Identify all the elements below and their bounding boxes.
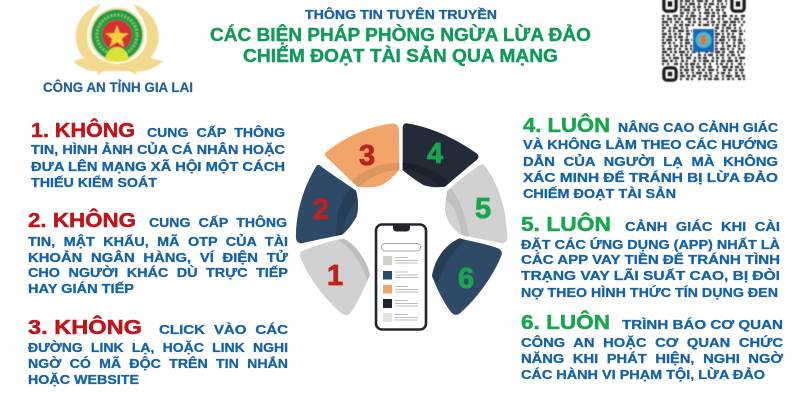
rule 1: TIN, HÌNH ẢNH CỦA CÁ NHÂN HOẶC <box>31 142 286 157</box>
rule 4: CHIẾM ĐOẠT TÀI SẢN <box>523 186 676 201</box>
rule 3: HOẶC WEBSITE <box>28 372 139 387</box>
rule 1 <box>31 118 286 190</box>
title: THÔNG TIN TUYÊN TRUYỀN <box>305 7 497 22</box>
rule 4: XÁC MINH ĐỂ TRÁNH BỊ LỪA ĐẢO <box>523 170 778 185</box>
rule 1: THIẾU KIỂM SOÁT <box>31 175 157 190</box>
rule 3: NGỜ CÓ MÃ ĐỘC TRÊN TIN NHẮN <box>28 356 288 371</box>
title: CÁC BIỆN PHÁP PHÒNG NGỪA LỪA ĐẢO <box>210 24 591 45</box>
rule 4: DẪN CỦA NGƯỜI LẠ MÀ KHÔNG <box>523 154 778 169</box>
rule 2: 2. KHÔNG <box>28 208 136 232</box>
QR code <box>662 0 745 80</box>
segment 2 <box>296 165 358 243</box>
rule 3: ĐƯỜNG LINK LẠ, HOẶC LINK NGHI <box>28 340 288 355</box>
rule 4: NÂNG CAO CẢNH GIÁC <box>618 120 779 135</box>
segment 3 <box>325 123 399 187</box>
logo: police emblem <box>73 4 163 75</box>
segment 1 <box>300 239 370 315</box>
rule 2: TIN, MẬT KHẨU, MÃ OTP CỦA TÀI <box>28 234 288 249</box>
rule 5: CẢNH GIÁC KHI CÀI <box>625 219 780 234</box>
rule 2: HAY GIÁN TIẾP <box>28 281 134 296</box>
phone illustration <box>376 224 426 330</box>
rule 2: CUNG CẤP THÔNG <box>149 215 287 230</box>
ring of numbered segments <box>296 123 507 315</box>
segment 2: 2 <box>313 194 329 226</box>
segment 1: 1 <box>327 260 343 292</box>
rule 1: 1. KHÔNG <box>31 118 135 142</box>
title: CHIẾM ĐOẠT TÀI SẢN QUA MẠNG <box>243 45 558 66</box>
rule 3: 3. KHÔNG <box>28 315 142 339</box>
segment 4 <box>403 123 478 187</box>
segment 6 <box>432 238 502 315</box>
rule 5: ĐẶT CÁC ỨNG DỤNG (APP) NHẤT LÀ <box>521 237 781 252</box>
rule 6: CÁC HÀNH VI PHẠM TỘI, LỪA ĐẢO <box>521 367 765 382</box>
rule 5: CÁC APP VAY TIỀN ĐỂ TRÁNH TÌNH <box>521 252 780 267</box>
rule 1: CUNG CẤP THÔNG <box>147 125 285 140</box>
rule 5: TRẠNG VAY LÃI SUẤT CAO, BỊ ĐÒI <box>521 268 780 283</box>
rule 2: CHO NGƯỜI KHÁC DÙ TRỰC TIẾP <box>28 265 288 280</box>
rule 4: 4. LUÔN <box>523 113 610 137</box>
rule 5: 5. LUÔN <box>521 212 611 236</box>
rule 2 <box>28 208 288 296</box>
rule 6: NĂNG KHI PHÁT HIỆN, NGHI NGỜ <box>521 351 784 366</box>
rule 4: VÀ KHÔNG LÀM THEO CÁC HƯỚNG <box>523 137 778 152</box>
segment 4: 4 <box>427 138 443 170</box>
title <box>210 7 591 66</box>
rule 5 <box>521 212 781 300</box>
logo caption: CÔNG AN TỈNH GIA LAI <box>43 80 193 95</box>
rule 6: CÔNG AN HOẶC CƠ QUAN CHỨC <box>521 335 784 350</box>
segment 5: 5 <box>475 193 491 225</box>
segment 5 <box>445 164 507 243</box>
rule 5: NỢ THEO HÌNH THỨC TÍN DỤNG ĐEN <box>521 285 778 300</box>
rule 3 <box>28 315 289 387</box>
rule 6: TRÌNH BÁO CƠ QUAN <box>622 317 783 332</box>
rule 6 <box>521 310 784 382</box>
segment 3: 3 <box>359 140 375 172</box>
rule 1: ĐƯA LÊN MẠNG XÃ HỘI MỘT CÁCH <box>31 159 285 174</box>
segment 6: 6 <box>458 263 474 295</box>
rule 4 <box>523 113 779 201</box>
rule 2: KHOẢN NGÂN HÀNG, VÍ ĐIỆN TỬ <box>28 250 288 265</box>
rule 3: CLICK VÀO CÁC <box>159 322 289 337</box>
rule 6: 6. LUÔN <box>521 310 610 334</box>
